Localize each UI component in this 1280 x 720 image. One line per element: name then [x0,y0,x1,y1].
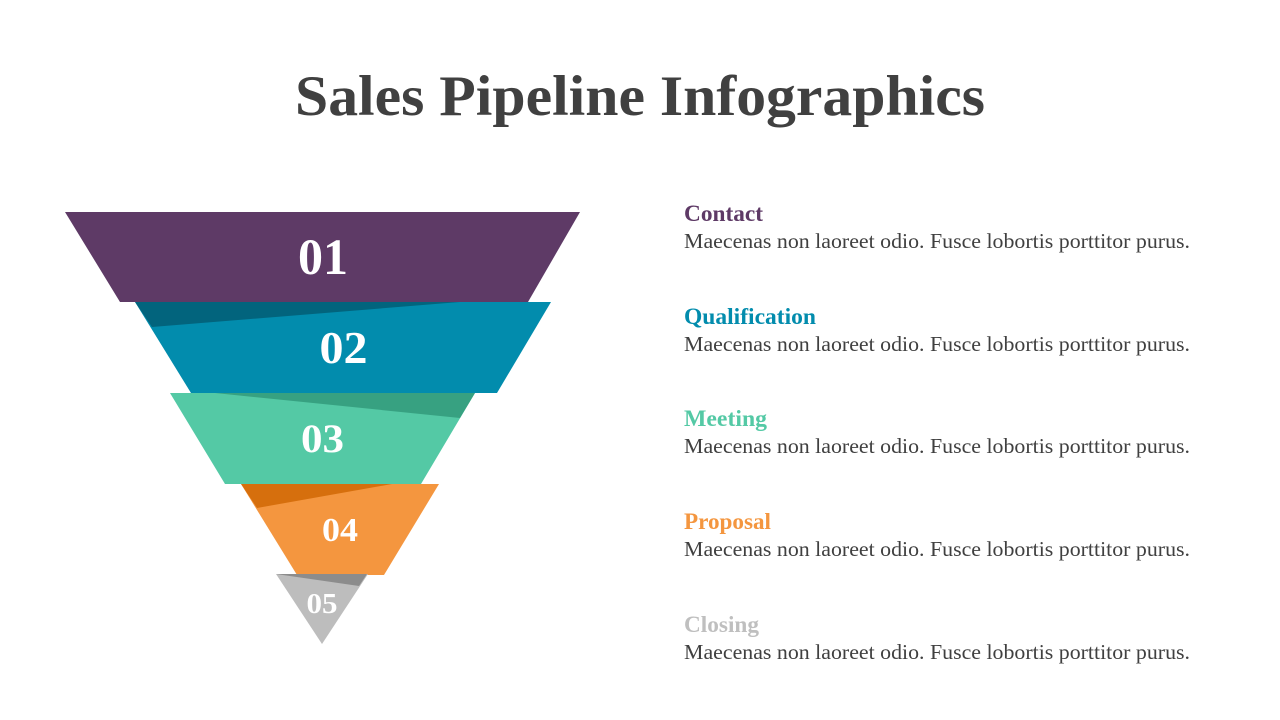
item: Meeting: Maecenas non laoreet odio. Fusce lobortis porttitor purus. [684,434,1190,458]
item: Contact: Contact [684,201,763,226]
funnel band 03: 03 [301,416,344,461]
item: Proposal: Proposal [684,509,771,534]
item: Closing: Closing [684,612,759,637]
item: Qualification [684,304,1190,356]
item: Closing: Maecenas non laoreet odio. Fusce lobortis porttitor purus. [684,640,1190,664]
funnel band 04 [241,484,439,575]
item: Proposal: Maecenas non laoreet odio. Fusce lobortis porttitor purus. [684,537,1190,561]
item: Contact: Maecenas non laoreet odio. Fusce lobortis porttitor purus. [684,229,1190,253]
funnel chart [65,212,580,644]
funnel band 01: 01 [298,230,348,286]
item: Closing [684,612,1190,664]
funnel band 01 [65,212,580,302]
item: Proposal [684,509,1190,561]
item: Meeting [684,406,1190,458]
item: Meeting: Meeting [684,406,768,431]
funnel band 05 [276,574,368,644]
funnel band 03 [170,393,475,484]
funnel band 02: 02 [320,323,368,373]
funnel band 05: 05 [306,589,338,620]
title: Sales Pipeline Infographics [295,65,985,128]
item: Qualification: Maecenas non laoreet odio. Fusce lobortis porttitor purus. [684,332,1190,356]
item: Contact [684,201,1190,253]
funnel band 04: 04 [322,512,358,549]
item: Qualification: Qualification [684,304,816,329]
funnel band 02 [135,302,551,393]
